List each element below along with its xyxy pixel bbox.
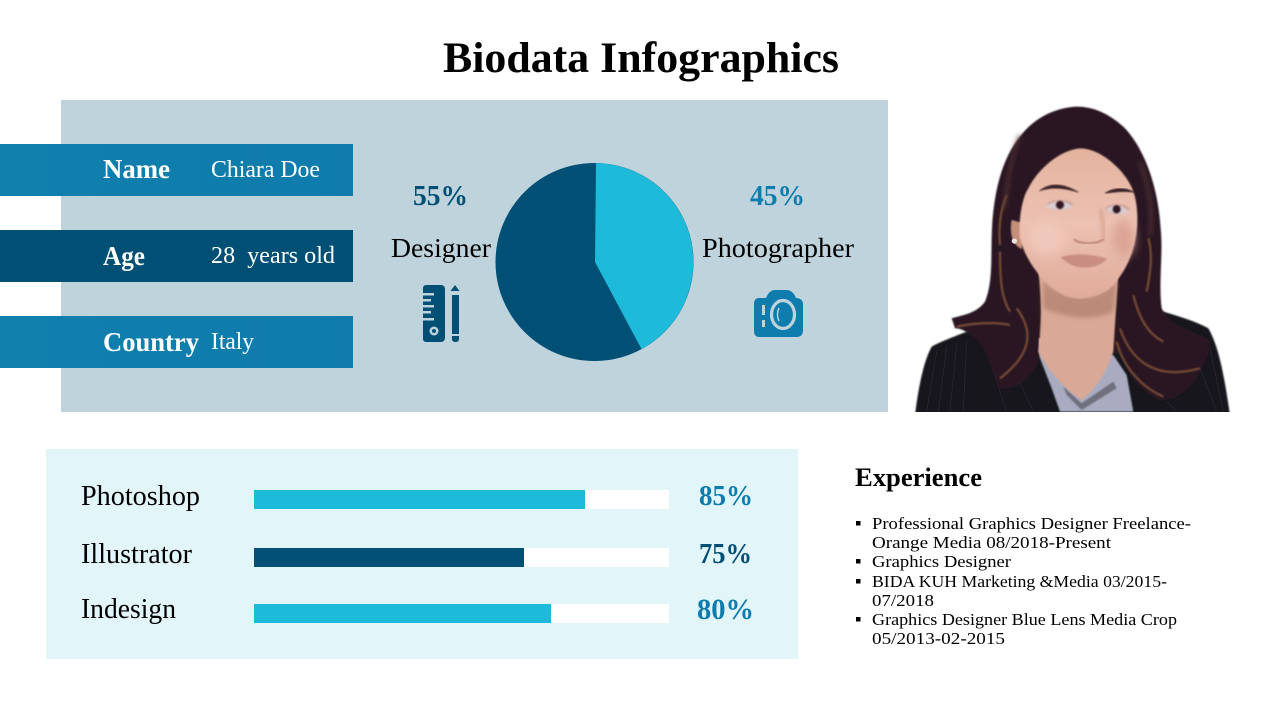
panel: profile background [61,100,888,412]
neck [1038,272,1118,400]
photo: portrait of woman [915,107,1230,415]
hair behind neck, right side [1112,338,1120,354]
blouse [1038,342,1134,412]
face [1020,148,1137,298]
eyes [1046,200,1130,214]
text block: experience list: BIDA KUH Marketing &Media 03/2015- [872,572,1167,591]
earring [1012,238,1017,244]
lips [1061,254,1107,268]
panel: name row: Chiara Doe [211,157,320,183]
skill: Illustrator [81,538,752,570]
warm hair strands [957,195,1200,397]
panel: age row: Age [103,241,145,271]
ear [1011,220,1025,249]
title: Biodata Infographics [443,35,839,82]
panel: country row [0,316,353,368]
hair behind neck [1032,280,1118,338]
icon: camera [754,290,803,337]
hair mass with lower locks over jacket [952,107,1210,400]
skill: Photoshop: 85% [699,480,753,512]
skill: Indesign: Indesign [81,594,176,625]
stat: designer [391,180,491,263]
panel: name row [0,144,353,196]
text block: experience list: Professional Graphics Designer Freelance- [872,514,1191,533]
text block: experience list: 05/2013-02-2015 [872,629,1005,648]
jacket stripes [927,340,1223,412]
stat: designer: 55% [413,180,468,212]
text block: experience list: Orange Media 08/2018-Present [872,533,1111,552]
panel: name row: Name [103,154,170,184]
stat: photographer: Photographer [702,233,854,263]
panel: age row: 28 years old [211,243,335,269]
stat: photographer [702,180,854,263]
skill: Indesign: 80% [697,593,754,626]
heading: experience: Experience [855,463,982,492]
pie chart [496,163,694,361]
nose shade [1100,208,1104,240]
skill: Illustrator: 75% [699,538,752,570]
skill: Indesign [81,593,754,626]
panel: age row [0,230,353,282]
text block: experience list: 07/2018 [872,591,934,610]
panel: skills background [46,449,798,659]
skill: Photoshop: Photoshop [81,481,200,512]
jacket [915,312,1230,415]
eyebrows [1039,185,1078,192]
text block: experience list: Graphics Designer [872,552,1011,571]
icon: ruler and pencil [423,285,460,342]
cheeks [1030,226,1063,255]
stat: photographer: 45% [750,180,805,212]
skill: Photoshop [81,480,753,512]
panel: country row: Country [103,327,199,357]
skill: Illustrator: Illustrator [81,539,193,570]
stat: designer: Designer [391,233,491,263]
text block: experience list: Graphics Designer Blue Lens Media Crop [872,610,1177,629]
panel: country row: Italy [211,329,254,355]
text block: experience list [856,514,1191,648]
